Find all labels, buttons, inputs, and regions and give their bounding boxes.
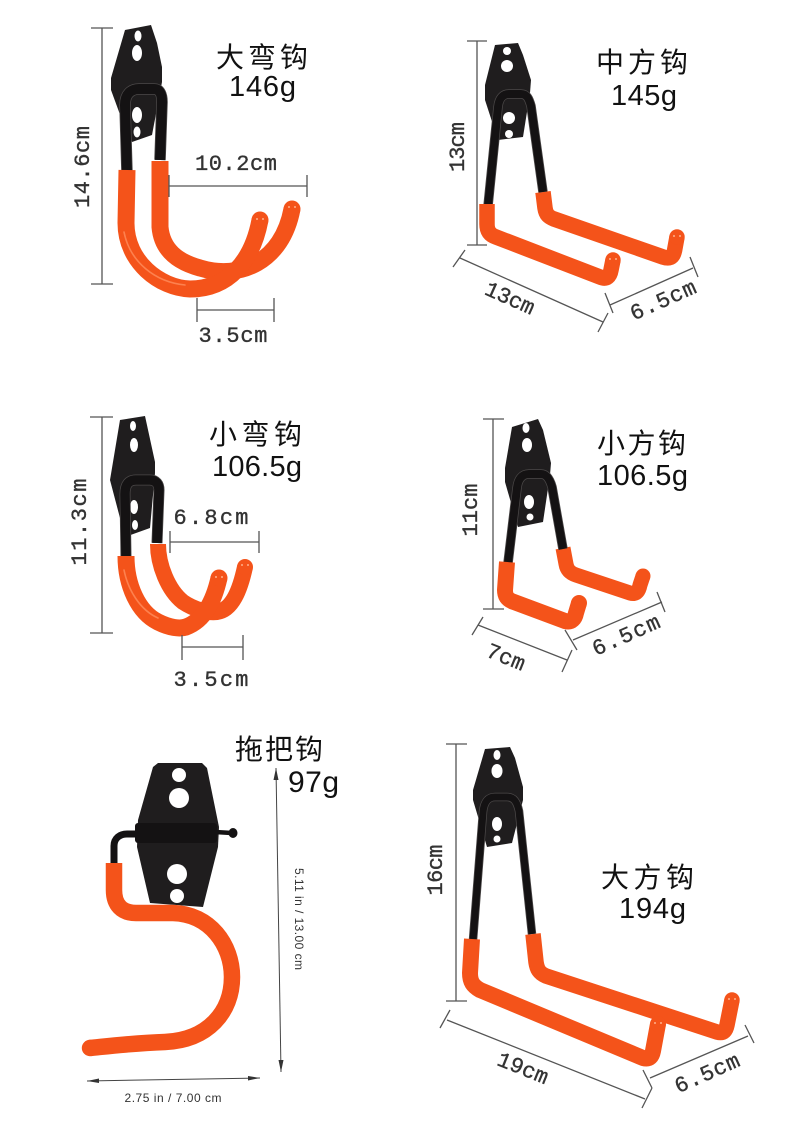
dimension: width 10.2cm <box>169 152 307 197</box>
dimension: length 19cm: 19cm <box>493 1048 552 1091</box>
dimension: height 13cm: 13cm <box>446 122 471 172</box>
label: name and weight: 大方钩 <box>601 862 694 893</box>
icon: medium square hook <box>485 43 685 278</box>
dimension: width 6.8cm: 6.8cm <box>174 506 248 531</box>
label: name and weight <box>235 734 339 799</box>
panel: large curved hook <box>71 25 308 349</box>
panel: small curved hook <box>68 416 302 693</box>
label: name and weight <box>596 47 688 112</box>
label: name and weight: 194g <box>619 893 686 925</box>
label: name and weight <box>601 862 694 925</box>
label: name and weight <box>597 428 688 492</box>
panel: large square hook <box>424 744 754 1108</box>
panel: mop hook <box>82 734 339 1105</box>
dimension: height 14.6cm <box>71 28 113 284</box>
label: name and weight: 97g <box>288 766 339 799</box>
dimension: width 2.75 in / 7.00 cm: 2.75 in / 7.00 cm <box>124 1091 222 1105</box>
dimension: height 13cm <box>446 41 487 245</box>
dimension: height 11.3cm <box>68 417 113 633</box>
label: name and weight <box>216 42 308 103</box>
icon: large curved hook <box>111 25 300 289</box>
dimension: length 7cm: 7cm <box>482 639 529 677</box>
dimension: height 5.11 in / 13.00 cm: 5.11 in / 13.00 cm <box>292 868 306 970</box>
dimension: height 11cm: 11cm <box>459 484 484 536</box>
dimension: depth 3.5cm: 3.5cm <box>198 324 268 349</box>
label: name and weight <box>209 419 302 483</box>
dimension: height 16cm <box>424 744 467 1001</box>
icon: small square hook <box>505 419 650 621</box>
dimension: height 14.6cm: 14.6cm <box>71 126 96 208</box>
dimension: width 6.8cm <box>170 506 259 553</box>
dimension: height 5.11 in / 13.00 cm <box>274 768 306 1072</box>
label: name and weight: 拖把钩 <box>235 734 323 765</box>
label: name and weight: 小弯钩 <box>209 419 302 450</box>
dimension: spacing 6.5cm: 6.5cm <box>589 610 665 662</box>
label: name and weight: 大弯钩 <box>216 42 308 73</box>
dimension: length 19cm <box>440 1010 652 1108</box>
dimension: length 13cm: 13cm <box>481 277 538 321</box>
dimension: height 11cm <box>459 419 504 609</box>
dimension: depth 3.5cm <box>174 635 248 693</box>
dimension: spacing 6.5cm <box>605 257 701 327</box>
dimension: depth 3.5cm <box>197 298 274 349</box>
panel: small square hook <box>459 419 688 677</box>
dimension: length 7cm <box>472 617 572 677</box>
icon: small curved hook <box>110 416 253 628</box>
dimension: width 2.75 in / 7.00 cm <box>87 1076 260 1105</box>
dimension: length 13cm <box>453 250 608 332</box>
dimension: spacing 6.5cm <box>565 592 665 662</box>
dimension: height 11.3cm: 11.3cm <box>68 478 93 566</box>
label: name and weight: 小方钩 <box>597 428 686 459</box>
panel: medium square hook <box>446 41 701 332</box>
dimension: height 16cm: 16cm <box>424 844 449 896</box>
icon: mop hook <box>82 763 238 1056</box>
label: name and weight: 145g <box>611 80 677 112</box>
dimension: spacing 6.5cm: 6.5cm <box>627 276 701 327</box>
icon: large square hook <box>470 747 740 1059</box>
dimension: depth 3.5cm: 3.5cm <box>174 668 248 693</box>
label: name and weight: 106.5g <box>212 451 302 483</box>
label: name and weight: 中方钩 <box>596 47 688 78</box>
dimension: spacing 6.5cm: 6.5cm <box>671 1049 744 1100</box>
label: name and weight: 106.5g <box>597 460 688 492</box>
label: name and weight: 146g <box>229 71 296 103</box>
dimension: width 10.2cm: 10.2cm <box>195 152 277 177</box>
dimension: spacing 6.5cm <box>643 1025 754 1100</box>
